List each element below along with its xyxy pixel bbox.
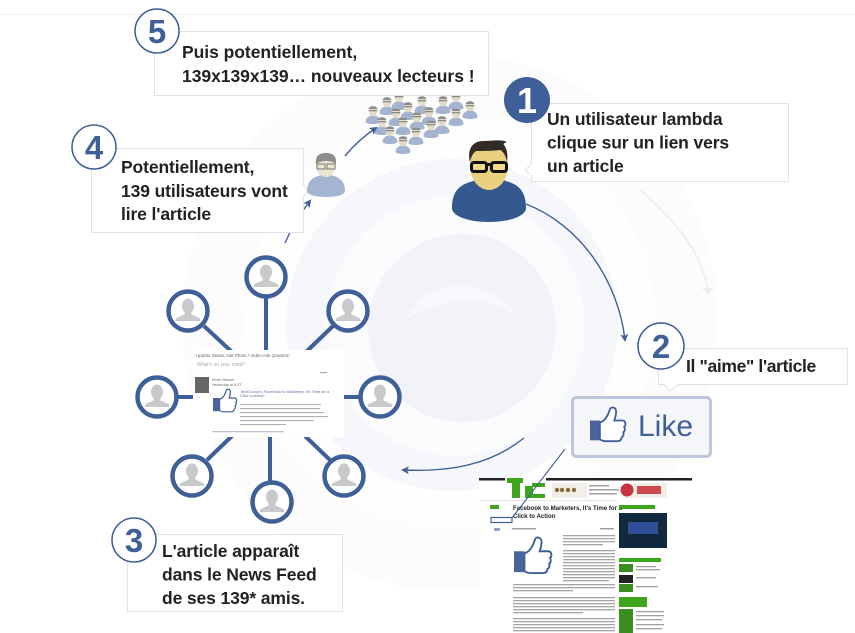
text: step 5: 139x139x139… nouveaux lecteurs ! [182,66,475,86]
badge: 1 [504,77,550,123]
badge: 5 [135,9,179,53]
card: news feed post [193,350,344,437]
text: step 2: Il "aime" l'article [686,356,816,376]
icon: main user avatar [452,140,526,222]
text: step 1: un article [547,156,624,176]
badge: 1: 1 [517,80,537,121]
text: step 3: L'article apparaît [162,541,299,561]
badge: 4: 4 [85,129,104,166]
text: step 1: Un utilisateur lambda [547,109,723,129]
badge: 3 [112,518,156,562]
screenshot: TechCrunch article: Click to Action [513,513,556,520]
arrow: like to news feed [403,438,524,470]
panel: step 1 [525,104,788,182]
panel: step 5 [154,32,488,96]
panel: step 4 [92,148,308,232]
badge: 4 [72,125,116,169]
card: news feed post: What's on your mind? [197,362,245,368]
badge: 2: 2 [652,328,670,365]
panel: step 3 [128,534,342,612]
text: step 4: 139 utilisateurs vont [121,181,288,201]
panel: step 2 [658,348,848,391]
text: step 4: Potentiellement, [121,157,254,177]
button: Like [572,398,710,456]
diagram: friends network [138,258,400,522]
text: step 4: lire l'article [121,204,211,224]
text: step 1: clique sur un lien vers [547,132,729,152]
badge: 2 [638,323,684,369]
card: news feed post: Update Status Add Photo / Video Ask Question [196,353,290,358]
text: step 5: Puis potentiellement, [182,42,357,62]
text: step 3: dans le News Feed [162,564,317,584]
text: step 3: de ses 139* amis. [162,588,305,608]
arrow: user to like [526,204,625,340]
screenshot: TechCrunch article: Facebook to Marketers, It's Time for a [513,505,623,512]
screenshot: TechCrunch article [479,478,692,633]
badge: 3: 3 [125,522,143,559]
icon: crowd of readers [366,92,478,154]
icon: reader avatar [307,153,345,197]
arrow: avatar to crowd [345,128,376,156]
card: news feed post: Yesterday at 9:27 [212,383,241,387]
card: news feed post: TechCrunch | Facebook to Marketers, It's Time for a [240,389,330,394]
card: news feed post: Click to Action [240,393,264,398]
arrow: friends to reader [285,201,310,243]
arrow: like button to article [512,449,565,518]
button: Like: Like [638,410,693,443]
card: news feed post: Kevin Nelson [212,378,234,382]
badge: 5: 5 [148,13,166,50]
